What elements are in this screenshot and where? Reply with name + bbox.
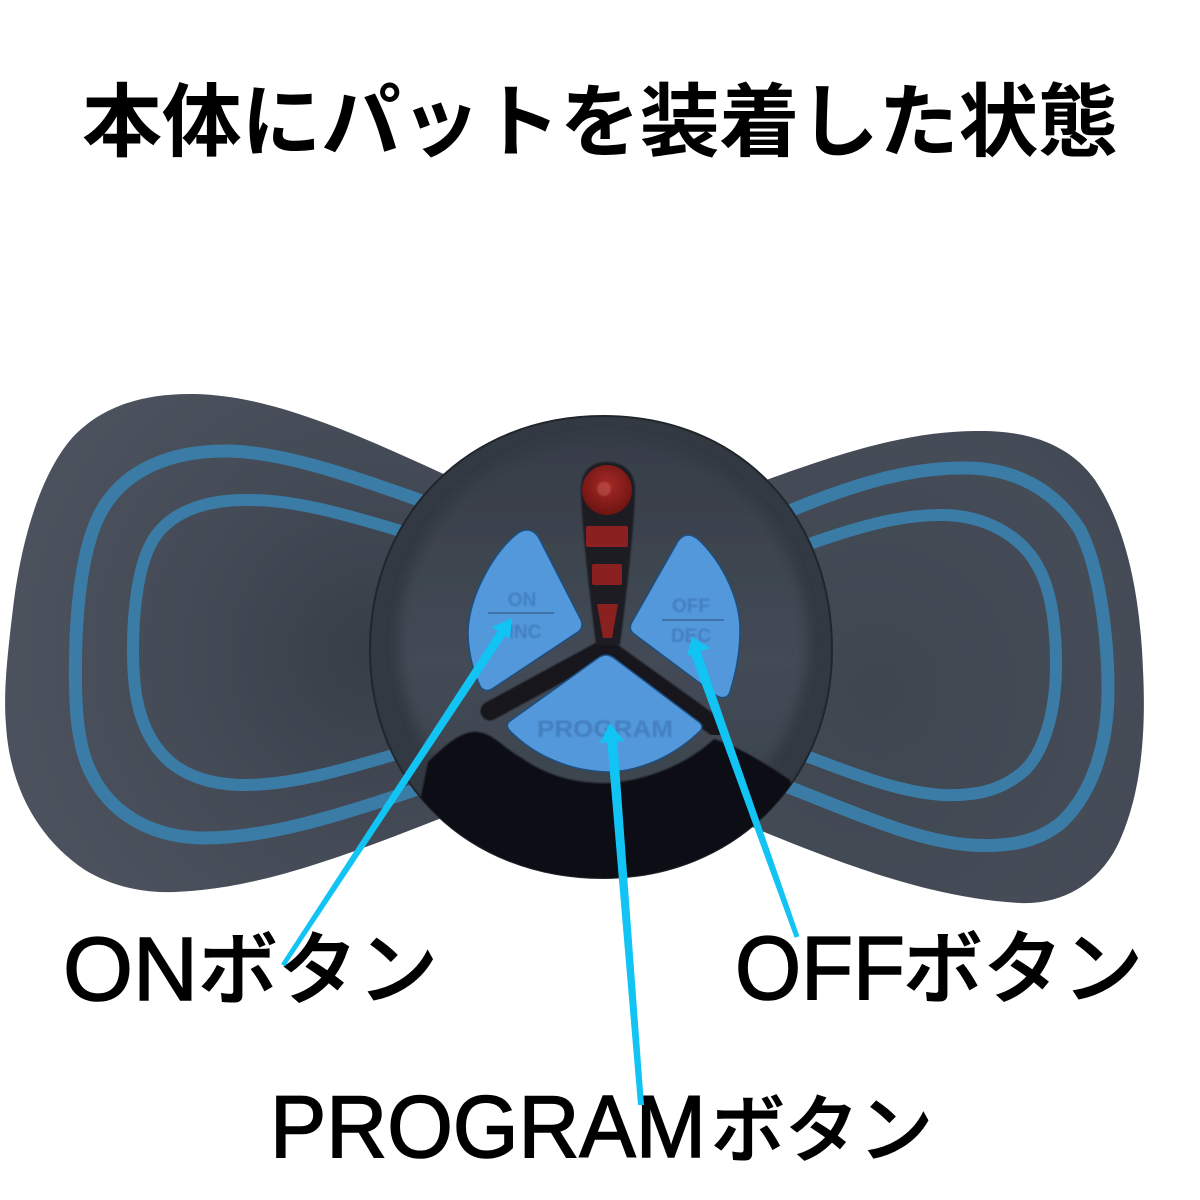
title: 本体にパットを装着した状態	[82, 58, 1118, 174]
label: ON button: ボタン	[198, 906, 438, 1022]
PROGRAM button: PROGRAM	[537, 716, 673, 743]
round controller body	[370, 416, 832, 900]
PROGRAM button	[507, 655, 702, 772]
label: PROGRAM button: PROGRAM	[270, 1077, 706, 1176]
ON button	[468, 530, 582, 690]
label: ON button: ON	[63, 920, 198, 1020]
OFF button: OFF	[672, 596, 710, 617]
arrow: ON button	[281, 618, 512, 966]
label: ON button	[63, 906, 438, 1022]
right electrode pad	[700, 431, 1144, 903]
label: OFF button: OFF	[735, 919, 905, 1019]
device illustration	[5, 394, 1144, 903]
label: PROGRAM button	[270, 1071, 933, 1178]
OFF button	[630, 535, 740, 698]
arrow: OFF button	[687, 637, 799, 938]
indicator lights	[581, 462, 635, 645]
arrow: PROGRAM button	[600, 723, 644, 1105]
OFF button: DEC	[671, 626, 711, 647]
label: OFF button: ボタン	[903, 905, 1143, 1021]
label: OFF button	[735, 905, 1143, 1021]
button channels	[490, 648, 716, 727]
ON button: INC	[509, 622, 542, 643]
ON button: ON	[508, 590, 536, 611]
label: PROGRAM button: ボタン	[711, 1071, 933, 1178]
left electrode pad	[5, 394, 500, 892]
